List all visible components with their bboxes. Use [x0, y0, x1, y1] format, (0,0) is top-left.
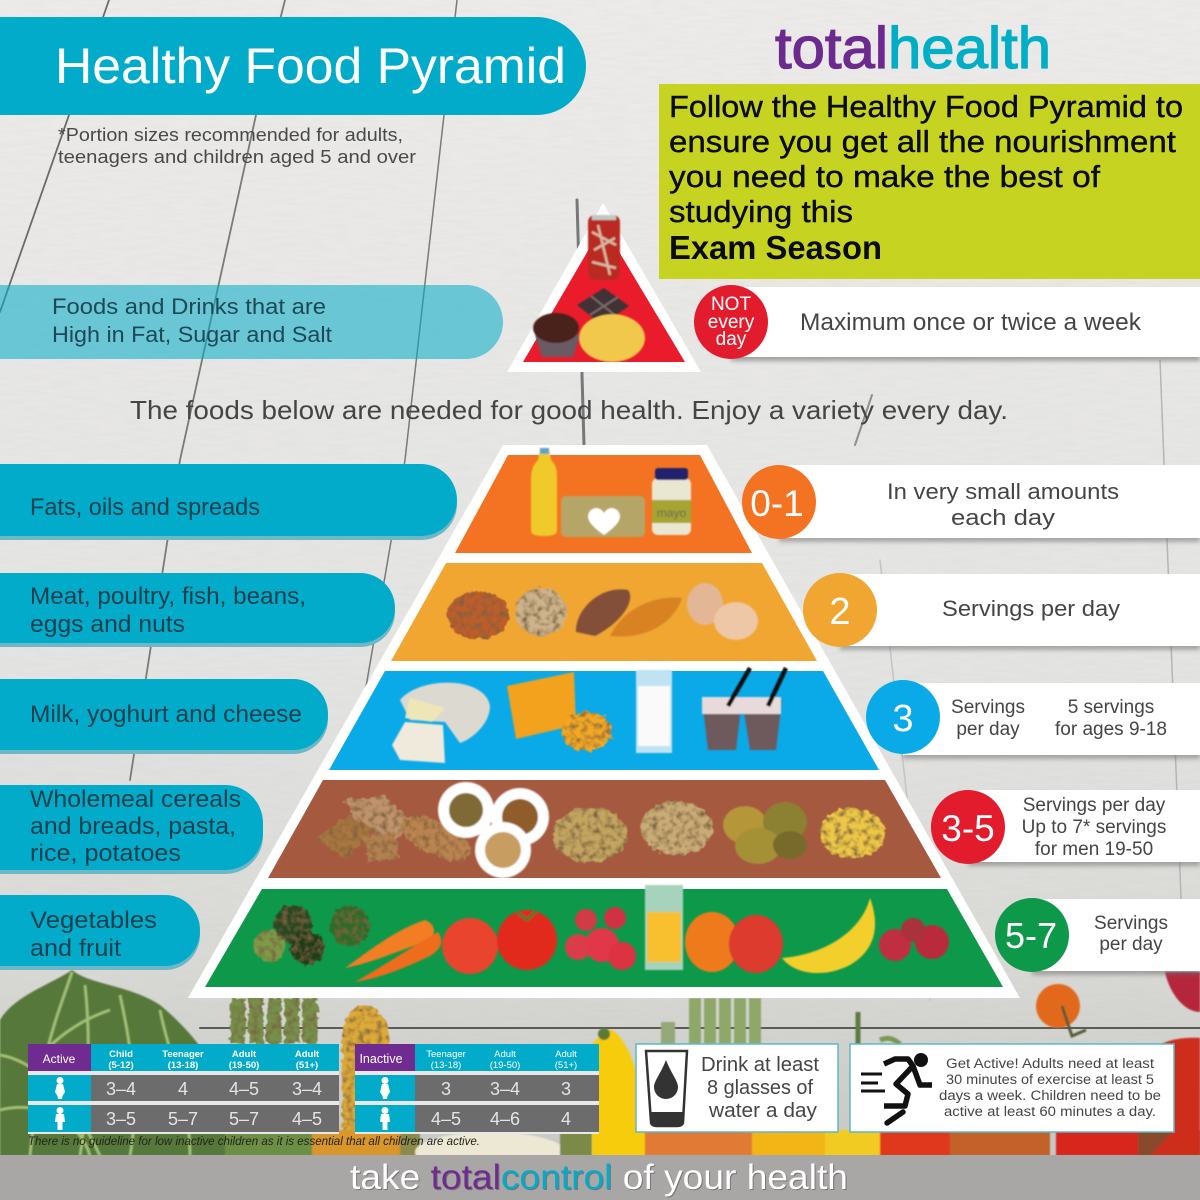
portion note: teenagers and children aged 5 and over — [58, 147, 416, 167]
servings: vegetables: per day — [1099, 934, 1163, 955]
icon: cereal bowls — [438, 782, 549, 878]
icon: orange — [685, 912, 739, 972]
servings: dairy: Servings — [951, 697, 1025, 718]
label: meat — [0, 573, 395, 647]
icon: male figure — [380, 1107, 390, 1130]
tier: dairy — [329, 668, 879, 770]
servings: dairy: per day — [956, 719, 1020, 740]
footer band: take totalcontrol of your health — [350, 1158, 848, 1197]
table: active: 4–5 — [292, 1109, 322, 1129]
water box — [636, 1044, 838, 1132]
portion note — [58, 125, 416, 167]
servings: cereals: for men 19-50 — [1035, 839, 1153, 860]
table: inactive: 3–4 — [490, 1079, 520, 1099]
footer band — [0, 1155, 1200, 1200]
yellow squash — [592, 1028, 650, 1156]
main pyramid base — [188, 445, 1020, 998]
table: inactive: 3 — [561, 1079, 571, 1099]
right tomatoes — [1036, 972, 1200, 1156]
icon: brie — [392, 683, 490, 763]
table: inactive: 3 — [441, 1079, 451, 1099]
label: cereals — [0, 785, 263, 874]
label: vegetables — [0, 895, 200, 970]
icon: tomatoes — [442, 910, 557, 974]
servings: meat: Servings per day — [942, 596, 1120, 621]
table: inactive — [355, 1044, 599, 1134]
table: inactive: 4–6 — [490, 1109, 520, 1129]
activity box: Get Active! Adults need at least — [946, 1056, 1154, 1071]
lime callout — [659, 84, 1200, 279]
table: inactive: 4–5 — [431, 1109, 461, 1129]
peppers and carrots — [645, 1130, 1200, 1156]
water box: water a day — [708, 1100, 817, 1122]
table: active: 5–7 — [168, 1109, 198, 1129]
label: dairy — [0, 679, 328, 754]
table: inactive: Adult — [555, 1049, 577, 1060]
table: inactive: 4 — [561, 1109, 571, 1129]
icon: crackers and bread — [317, 796, 478, 869]
icon: rice — [641, 801, 713, 855]
lime callout: ensure you get all the nourishment — [669, 124, 1176, 159]
tier: cereals — [268, 780, 941, 878]
label: fats: Fats, oils and spreads — [30, 494, 260, 521]
servings: cereals: Up to 7* servings — [1022, 817, 1166, 838]
label: cereals: rice, potatoes — [30, 840, 181, 867]
label: fats — [0, 464, 457, 540]
servings: dairy: 5 servings — [1068, 697, 1154, 718]
table: active: 4–5 — [229, 1079, 259, 1099]
icon: meat — [576, 589, 630, 636]
icon: oil bottle — [531, 448, 557, 536]
icon: male figure — [55, 1107, 65, 1130]
circle and bar: not every day — [694, 285, 1200, 361]
table: active: (19-50) — [229, 1060, 259, 1071]
activity box: 30 minutes of exercise at least 5 — [946, 1072, 1154, 1087]
servings: vegetables: 5-7 — [1005, 915, 1057, 956]
table: inactive: Inactive — [359, 1052, 403, 1066]
heading: Healthy Food Pyramid — [55, 38, 566, 94]
icon: mayo jar — [652, 468, 691, 535]
table: active: Active — [43, 1052, 76, 1066]
table: active: Teenager — [162, 1049, 204, 1060]
servings: cereals: 3-5 — [941, 808, 995, 849]
servings: fats: each day — [951, 505, 1055, 530]
icon: yoghurt pots — [702, 668, 786, 750]
servings: meat: 2 — [829, 591, 851, 633]
activity box — [850, 1044, 1174, 1132]
icon: yellow pasta — [819, 808, 885, 858]
vegetables background strip — [0, 970, 1200, 1172]
table: inactive: (13-18) — [431, 1060, 461, 1071]
icon: muffin — [533, 313, 580, 357]
circle and bar: not every day: Maximum once or twice a week — [800, 309, 1142, 336]
table: active: (5-12) — [108, 1060, 134, 1071]
servings: fats: In very small amounts — [887, 479, 1119, 504]
table: active: 3–4 — [106, 1079, 136, 1099]
circle and bar: not every day: NOT — [711, 294, 751, 315]
portion note: *Portion sizes recommended for adults, — [58, 125, 403, 145]
icon: spread tub — [561, 496, 645, 537]
table: active: 5–7 — [229, 1109, 259, 1129]
asparagus — [238, 998, 310, 1044]
label: foods high in fat sugar salt: Foods and Drinks that are — [52, 294, 326, 319]
table: active: Adult — [295, 1049, 320, 1060]
servings: fats: 0-1 — [750, 483, 804, 524]
icon: mayo jar: mayo — [657, 506, 686, 520]
icon: banana — [782, 898, 875, 973]
intro sentence: The foods below are needed for good health. Enjoy a variety every day. — [130, 395, 1008, 425]
label: meat: Meat, poultry, fish, beans, — [30, 583, 306, 610]
circle and bar: not every day: day — [716, 329, 747, 350]
label: foods high in fat sugar salt: High in Fat, Sugar and Salt — [52, 322, 332, 347]
table: active: 3–5 — [106, 1109, 136, 1129]
label: cereals: Wholemeal cereals — [30, 786, 241, 813]
tier: meat and protein — [391, 563, 817, 661]
servings: vegetables — [995, 898, 1200, 975]
table: active: Adult — [232, 1049, 257, 1060]
icon: nuts — [515, 588, 567, 636]
servings: fats — [742, 465, 1200, 542]
water box: 8 glasses of — [707, 1077, 813, 1099]
totalhealth logo: totalhealth — [775, 16, 1051, 81]
icon: eggs — [687, 583, 758, 640]
icon: female figure — [55, 1077, 65, 1099]
table footnote: There is no guideline for low inactive children as it is essential that all children are active. — [28, 1136, 480, 1148]
footer band: take totalcontrol of your health — [351, 1159, 849, 1198]
icon: crisps — [579, 314, 645, 362]
icon: cheddar block — [507, 672, 576, 739]
label: vegetables: and fruit — [30, 935, 121, 962]
label: cereals: and breads, pasta, — [30, 813, 236, 840]
circle and bar: not every day: every — [708, 312, 755, 333]
title banner — [0, 17, 586, 115]
servings: meat — [803, 573, 1200, 650]
icon: broccoli — [254, 905, 370, 965]
table: active: (51+) — [296, 1060, 318, 1071]
table: active — [28, 1044, 339, 1134]
table: active: 3–4 — [292, 1079, 322, 1099]
water box: Drink at least — [701, 1054, 819, 1076]
icon: beans — [447, 591, 509, 639]
table: active: 4 — [178, 1079, 188, 1099]
icon: juice glass — [645, 885, 683, 970]
servings: dairy: for ages 9-18 — [1055, 719, 1167, 740]
icon: pasta — [553, 808, 627, 862]
activity box: active at least 60 minutes a day. — [944, 1104, 1156, 1119]
lime callout: Exam Season — [669, 229, 882, 266]
servings: dairy — [866, 680, 1200, 759]
icon: grated cheese — [562, 711, 612, 751]
icon: female figure — [380, 1077, 390, 1099]
label: meat: eggs and nuts — [30, 611, 185, 638]
corn — [342, 1005, 390, 1156]
tier: vegetables and fruit — [205, 885, 1003, 987]
icon: carrots — [345, 920, 441, 982]
servings: dairy: 3 — [892, 698, 914, 740]
table: inactive: Adult — [494, 1049, 516, 1060]
celery — [668, 998, 900, 1050]
table: active: Child — [109, 1049, 133, 1060]
lime callout: studying this — [669, 194, 853, 229]
icon: apple — [729, 915, 783, 973]
tier: fats — [455, 448, 752, 553]
table: inactive: Teenager — [426, 1049, 466, 1060]
lime callout: Follow the Healthy Food Pyramid to — [669, 89, 1183, 124]
icon: plums — [879, 918, 949, 961]
activity box: days a week. Children need to be — [939, 1088, 1161, 1103]
servings: cereals — [931, 790, 1200, 866]
icon: fish — [610, 597, 682, 637]
cabbage — [0, 970, 232, 1156]
icon: potatoes — [723, 802, 807, 864]
label: dairy: Milk, yoghurt and cheese — [30, 701, 302, 728]
table: inactive: (19-50) — [490, 1060, 520, 1071]
lime callout: you need to make the best of — [669, 159, 1100, 194]
icon: running person — [861, 1053, 932, 1123]
icon: strawberries — [565, 907, 636, 970]
label: vegetables: Vegetables — [30, 907, 157, 934]
icon: glass of water — [646, 1051, 687, 1126]
table: inactive: (51+) — [555, 1060, 577, 1071]
icon: cola can — [588, 215, 620, 280]
table: active: (13-18) — [168, 1060, 198, 1071]
label: foods high in fat sugar salt — [0, 285, 503, 359]
strip below the tables — [225, 1130, 592, 1172]
servings: vegetables: Servings — [1094, 913, 1168, 934]
top pyramid: occasional foods — [507, 203, 701, 372]
icon: chocolate — [577, 288, 629, 325]
icon: milk glass — [636, 670, 672, 753]
servings: cereals: Servings per day — [1023, 795, 1166, 816]
